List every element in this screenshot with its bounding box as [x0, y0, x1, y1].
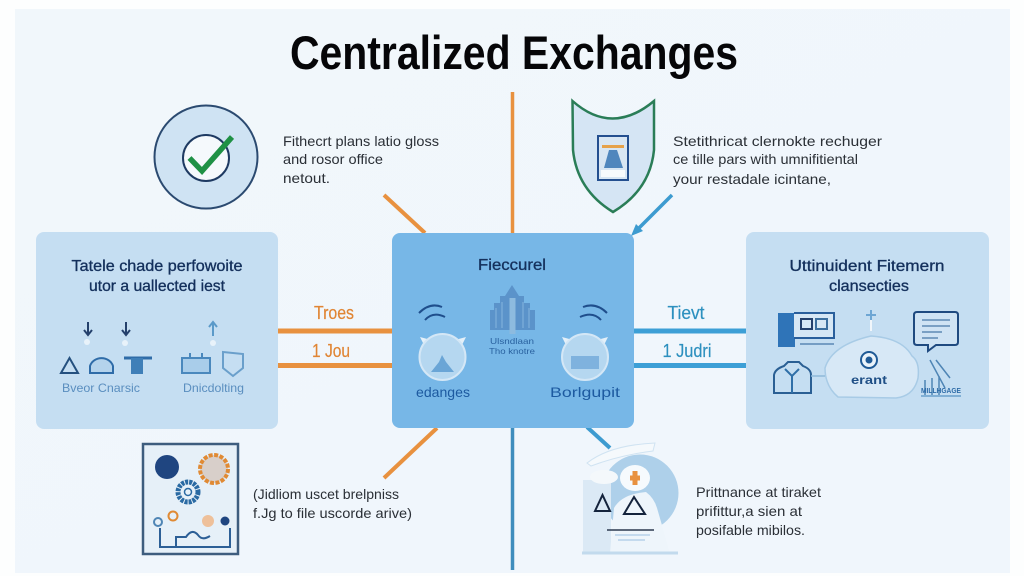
icon: chart lines — [921, 360, 961, 396]
panel: left — [36, 232, 278, 429]
connector lines — [278, 92, 746, 570]
title: Centralized Exchanges — [290, 26, 738, 79]
panel heading: right: Uttinuident Fitemern — [790, 258, 944, 275]
text: bottom right note: Prittnance at tiraket — [696, 484, 821, 500]
icon: right exchange node — [550, 305, 620, 400]
panel heading: left: utor a uallected iest — [89, 278, 226, 295]
text: bottom left note: f.Jg to file uscorde arive) — [253, 505, 412, 521]
icon: left exchange node — [416, 305, 470, 400]
text: bottom left note — [253, 486, 412, 521]
label: left connector: Troes — [314, 303, 354, 323]
text: top right note: ce tille pars with umnifitiental — [673, 151, 858, 167]
panel: center — [392, 233, 634, 428]
panel heading: left — [72, 258, 243, 295]
icon: building: Ulsndlaan — [490, 336, 534, 346]
label: left connector: 1 Jou — [312, 341, 350, 361]
panel heading: left: Tatele chade perfowoite — [72, 258, 243, 275]
text: bottom right note: posifable mibilos. — [696, 522, 805, 538]
icon: document card — [778, 313, 834, 347]
text: top left note — [283, 133, 439, 186]
icon: right exchange node: Borlgupit — [550, 384, 620, 400]
label: left panel icons — [62, 381, 244, 395]
icon: tree box — [774, 362, 825, 393]
text: bottom left note: (Jidliom uscet brelpniss — [253, 486, 399, 502]
icon: warning dome — [582, 443, 678, 553]
text: top right note — [673, 133, 882, 187]
text: top left note: and rosor office — [283, 151, 383, 167]
label: right connector: Tievt — [668, 303, 704, 323]
panel: right — [746, 232, 989, 429]
text: bottom right note — [696, 484, 821, 538]
label: left panel icons: Bveor Cnarsic — [62, 381, 140, 395]
icon: gears panel — [143, 444, 238, 554]
label: right connector: 1 Judri — [662, 341, 712, 361]
icon: shield — [572, 101, 654, 212]
text: top right note: your restadale icintane, — [673, 171, 831, 187]
icon: chart lines: MILLHGAGE — [921, 388, 961, 395]
label: left panel icons: Dnicdolting — [183, 381, 244, 395]
text: bottom right note: prifittur,a sien at — [696, 503, 802, 519]
panel heading: right — [790, 258, 944, 295]
icon group: left panel — [61, 322, 243, 376]
text: top right note: Stetithricat clernokte rechuger — [673, 133, 882, 149]
icon: speech bubble — [914, 312, 958, 351]
text: top left note: netout. — [283, 170, 330, 186]
text: top left note: Fithecrt plans latio gloss — [283, 133, 439, 149]
panel heading: right: clansecties — [829, 278, 909, 295]
label: right connector — [662, 303, 712, 361]
icon: check mark badge — [154, 106, 258, 208]
icon: central cloud with target — [825, 310, 918, 398]
label: left connector — [312, 303, 354, 361]
panel heading: center: Fieccurel — [478, 257, 546, 274]
icon: building: Tho knotre — [489, 346, 535, 356]
icon: left exchange node: edanges — [416, 384, 470, 400]
icon: building — [489, 285, 535, 356]
icon: central cloud with target: erant — [851, 375, 887, 387]
arrow: shield to center — [631, 195, 672, 236]
